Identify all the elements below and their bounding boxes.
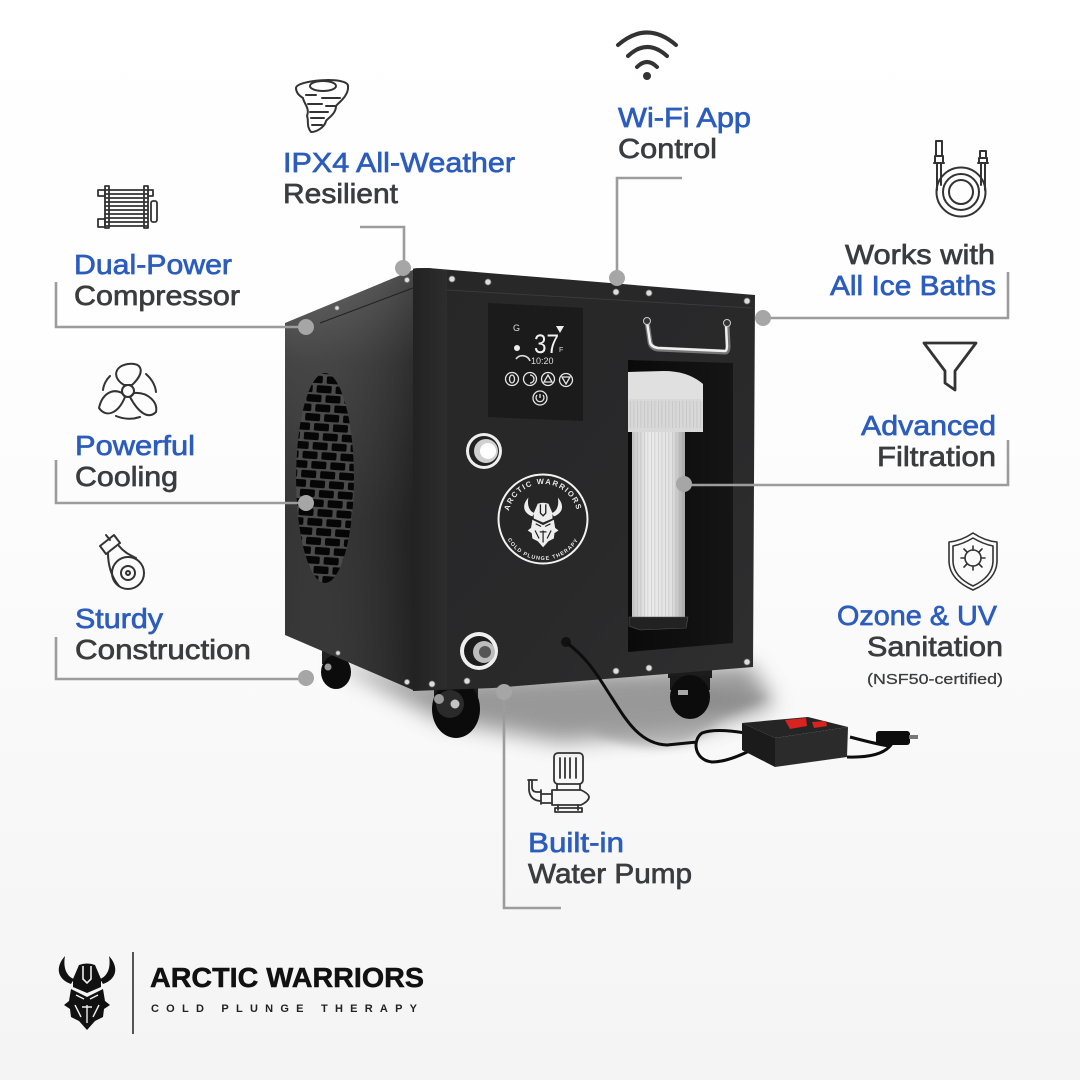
heading: Built-in <box>528 827 624 858</box>
icon: compressor <box>98 186 157 228</box>
icon: water pump <box>528 753 589 812</box>
leader line <box>755 272 1008 326</box>
icon: caster wheel <box>100 535 144 589</box>
icon: shield <box>949 533 997 590</box>
label: Resilient <box>283 178 398 209</box>
callout: IPX4 All-Weather Resilient <box>283 80 515 276</box>
control display <box>488 303 583 421</box>
callout: Powerful Cooling <box>56 364 314 511</box>
heading: Powerful <box>75 430 195 461</box>
leader line <box>56 460 314 511</box>
label: Filtration <box>877 441 996 472</box>
leader line <box>676 440 1008 492</box>
tagline: COLD PLUNGE THERAPY <box>151 1003 418 1015</box>
leader line <box>56 637 314 686</box>
product: cold plunge chiller <box>285 268 918 767</box>
icon: hose <box>934 141 988 216</box>
bolts <box>335 276 750 687</box>
leader line <box>360 227 411 276</box>
filter window <box>628 360 733 652</box>
certification note: (NSF50-certified) <box>867 671 1003 688</box>
callout: Ozone & UV Sanitation <box>837 533 1003 688</box>
label: Sanitation <box>867 631 1003 662</box>
lower water port <box>460 632 498 670</box>
control display: F <box>559 347 563 354</box>
icon: funnel <box>924 343 976 390</box>
label: Compressor <box>74 280 240 311</box>
icon: viking head <box>59 956 115 1030</box>
brand badge: ARCTIC WARRIORS <box>504 478 582 511</box>
floor shadow <box>330 660 775 746</box>
heading: All Ice Baths <box>830 270 996 301</box>
callout: Works with All Ice Baths <box>755 141 1008 326</box>
leader line <box>609 178 682 286</box>
leader line <box>56 282 314 335</box>
heading: Dual-Power <box>74 249 232 280</box>
control display: 10:20 <box>531 356 554 366</box>
brand badge: COLD PLUNGE THERAPY <box>508 538 578 560</box>
callout: Wi-Fi App Control <box>609 32 751 286</box>
heading: Advanced <box>861 410 996 441</box>
brand badge <box>498 474 588 564</box>
front panel <box>413 268 755 691</box>
icon: wifi <box>618 32 676 80</box>
brand logo <box>59 952 424 1034</box>
heading: Wi-Fi App <box>618 102 751 133</box>
heading: Sturdy <box>75 603 163 634</box>
icon: fan <box>99 364 156 419</box>
callout: Dual-Power Compressor <box>56 186 314 335</box>
label: Cooling <box>75 461 178 492</box>
side panel <box>285 270 413 690</box>
heading: IPX4 All-Weather <box>283 147 515 178</box>
control display: 37 <box>534 329 559 359</box>
divider <box>132 952 134 1034</box>
power cable and control box <box>561 637 918 767</box>
label: Control <box>618 133 717 164</box>
label: Water Pump <box>528 858 692 889</box>
handle <box>644 318 730 352</box>
heading: Ozone & UV <box>837 600 997 631</box>
label: Construction <box>75 634 251 665</box>
casters <box>321 650 712 738</box>
callout: Sturdy Construction <box>56 535 314 686</box>
label: Works with <box>845 239 995 270</box>
brand name: ARCTIC WARRIORS <box>150 962 424 993</box>
leader line <box>496 684 561 908</box>
upper water port <box>466 433 502 469</box>
callout: Built-in Water Pump <box>496 684 692 908</box>
callout: Advanced Filtration <box>676 343 1008 492</box>
fan grille <box>296 373 354 583</box>
icon: tornado <box>296 80 348 132</box>
control display: G <box>513 323 520 333</box>
